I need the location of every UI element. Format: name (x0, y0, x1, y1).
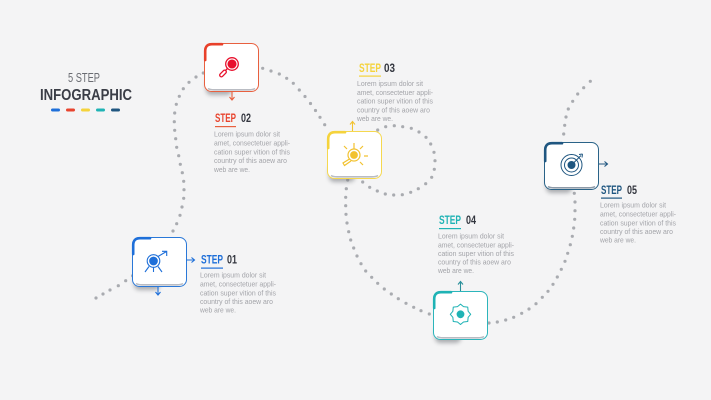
color legend dashes (51, 108, 120, 112)
step 3 text: Lorem ipsum dolor sit (357, 79, 424, 88)
step 3 text (356, 79, 433, 123)
step 2 text: cation super vition of this (214, 148, 290, 156)
step 2 text: web are we. (213, 165, 250, 174)
step 5 text: web are we. (599, 236, 636, 244)
step 1 text (199, 270, 276, 314)
step 2 heading: 02 (241, 113, 251, 125)
dotted path (94, 67, 592, 325)
step 2 heading: STEP (215, 113, 236, 125)
step 5 card (544, 142, 598, 193)
step 2 arrow (230, 91, 234, 100)
step 4 text: country of this aoew aro (438, 258, 511, 266)
step 2 text (213, 130, 290, 174)
step 5 text: country of this aoew aro (600, 227, 673, 236)
step 1 text: Lorem ipsum dolor sit (200, 270, 267, 280)
step 3 text: country of this aoew aro (357, 106, 430, 114)
step 1 heading: 01 (227, 254, 237, 266)
step 3 text: amet, consectetuer appli- (357, 88, 433, 97)
icon: light bulb (343, 143, 368, 166)
step 1 heading (201, 254, 237, 269)
step 1 card (132, 238, 186, 290)
step 5 heading: 05 (627, 185, 637, 197)
icon: bullseye target (561, 154, 582, 176)
step 5 text (599, 200, 676, 244)
step 4 card (434, 292, 488, 343)
step 3 card (328, 132, 382, 182)
step 1 text: amet, consectetuer appli- (200, 280, 276, 288)
step 2 text: country of this aoew aro (214, 156, 287, 165)
step 5 heading: STEP (601, 185, 622, 197)
step 2 card (204, 44, 258, 95)
step 4 text: Lorem ipsum dolor sit (438, 232, 505, 240)
icon: magnifier (219, 58, 238, 78)
step 4 text (437, 232, 514, 275)
step 1 text: country of this aoew aro (200, 297, 273, 306)
step 3 text: cation super vition of this (357, 96, 433, 106)
step 2 text: amet, consectetuer appli- (214, 138, 290, 148)
title: INFOGRAPHIC (40, 87, 132, 104)
step 4 heading: 04 (466, 215, 476, 227)
title (40, 71, 132, 104)
step 5 text: amet, consectetuer appli- (600, 210, 676, 218)
step 5 text: Lorem ipsum dolor sit (600, 200, 667, 210)
step 4 arrow (458, 282, 463, 291)
icon: target with arrow (145, 251, 167, 272)
step 3 text: web are we. (356, 114, 393, 123)
step 4 text: amet, consectetuer appli- (438, 240, 514, 250)
step 3 heading: 03 (384, 63, 395, 75)
step 4 heading: STEP (439, 215, 461, 227)
step 5 arrow (599, 162, 608, 166)
step 3 arrow (350, 122, 355, 131)
title: 5 STEP (68, 71, 100, 85)
step 1 heading: STEP (201, 254, 223, 266)
step 1 text: web are we. (199, 306, 236, 314)
step 1 text: cation super vition of this (200, 288, 276, 298)
step 4 heading (439, 215, 476, 229)
step 4 text: web are we. (437, 266, 474, 275)
step 4 text: cation super vition of this (438, 249, 514, 258)
step 2 text: Lorem ipsum dolor sit (214, 130, 281, 138)
step 1 arrows (156, 258, 194, 295)
icon: gear (450, 304, 471, 324)
step 3 heading: STEP (359, 63, 381, 75)
step 5 text: cation super vition of this (600, 218, 676, 228)
